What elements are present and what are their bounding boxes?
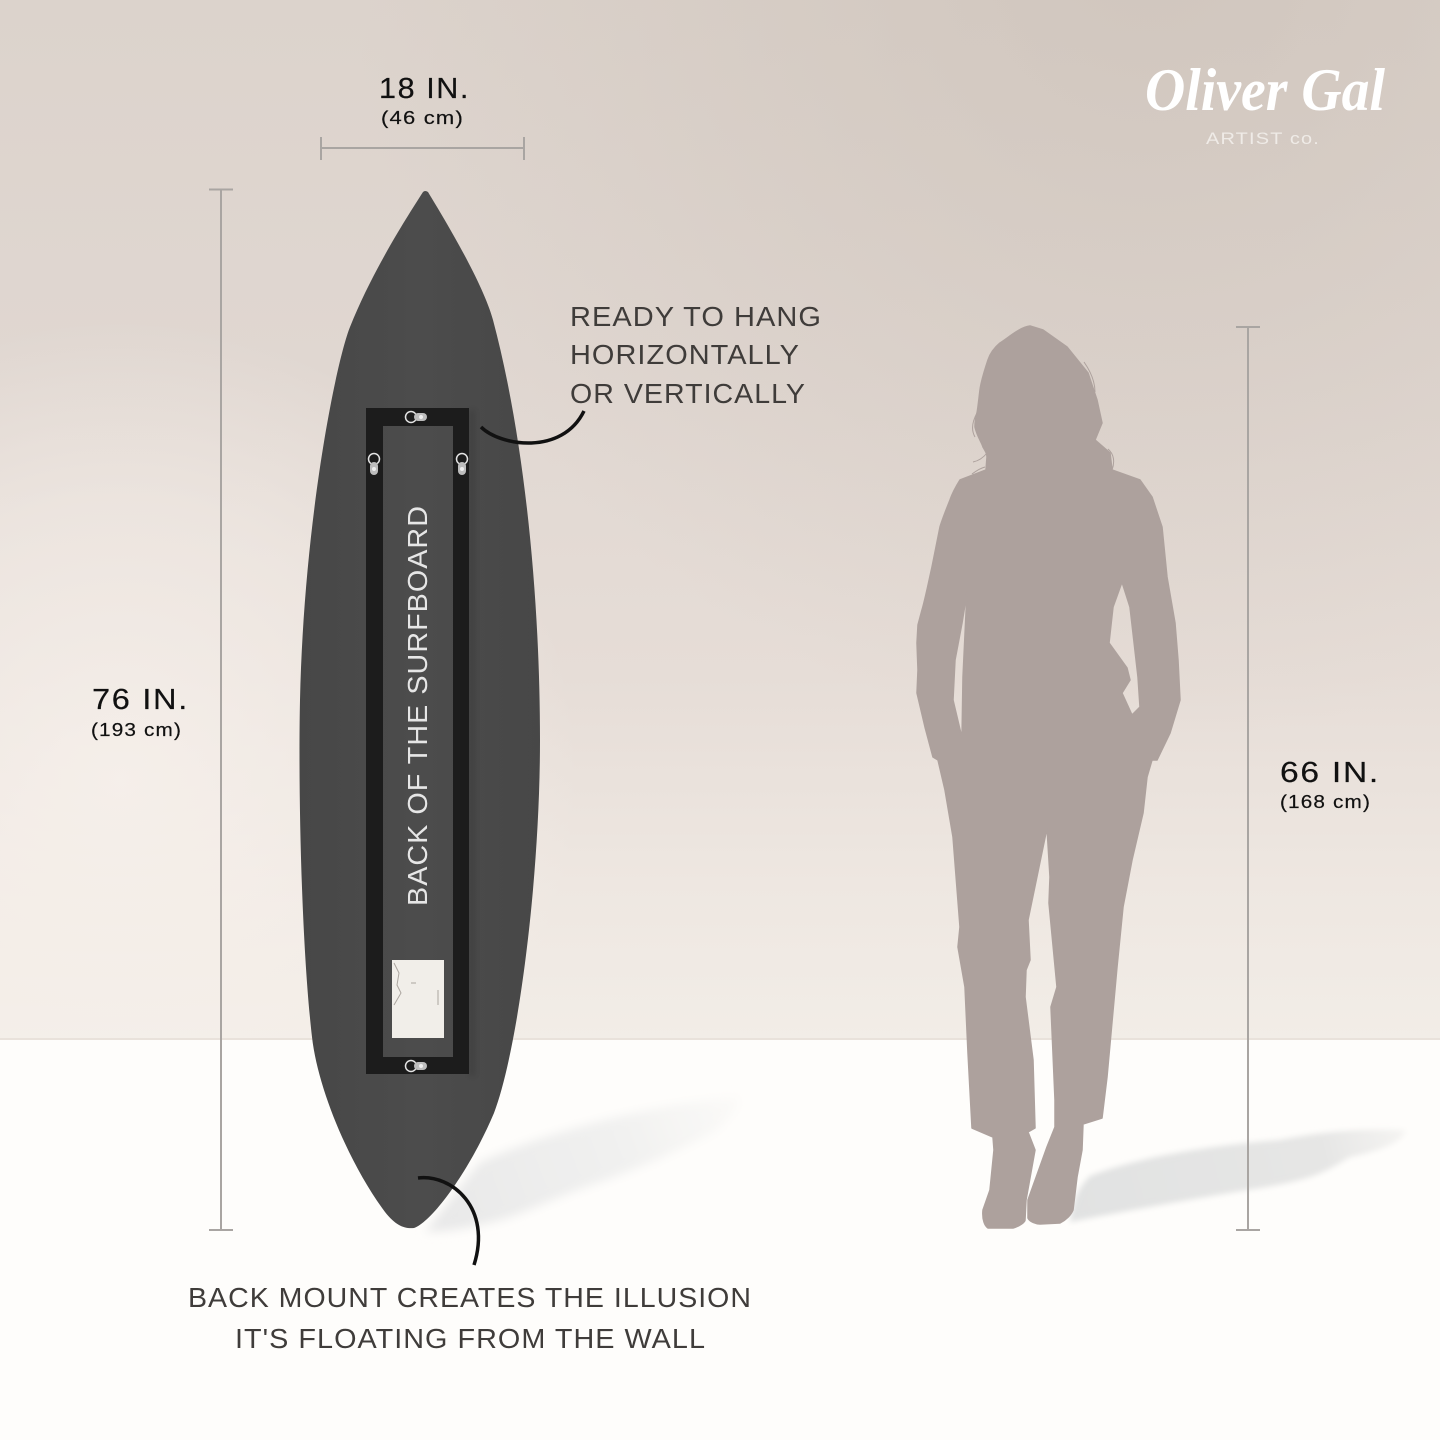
- product label sticker: [392, 960, 444, 1038]
- floor shadow: surfboard: [425, 1097, 739, 1232]
- width label: (46 cm): [381, 108, 464, 128]
- dimension line: board height: [209, 189, 233, 1230]
- hanging clip: top: [406, 412, 427, 422]
- hanging clip: right: [456, 454, 468, 475]
- logo: Oliver Gal Artist Co.: Oliver Gal: [1145, 57, 1385, 123]
- callout: ready to hang: READY TO HANG: [570, 301, 822, 332]
- board height label: 76 IN.: [92, 684, 189, 716]
- width label: [379, 73, 470, 128]
- board height label: [91, 684, 189, 740]
- arrow: back mount leader: [418, 1178, 478, 1265]
- person silhouette: [917, 326, 1180, 1228]
- callout: ready to hang: OR VERTICALLY: [570, 378, 806, 409]
- board height label: (193 cm): [91, 720, 182, 740]
- dimension line: board width: [321, 137, 524, 160]
- floor shadow: person: [1070, 1130, 1405, 1222]
- vertical label: back of the surfboard: BACK OF THE SURFBOARD: [402, 505, 433, 906]
- surfboard back: [300, 191, 540, 1228]
- hanging clip: left: [368, 454, 380, 475]
- logo: Oliver Gal Artist Co.: [1145, 57, 1385, 148]
- logo: Oliver Gal Artist Co.: ARTIST co.: [1206, 129, 1320, 148]
- back mount frame: [366, 408, 475, 1076]
- hanging clip: bottom: [406, 1060, 427, 1072]
- person height label: (168 cm): [1280, 792, 1371, 812]
- width label: 18 IN.: [379, 73, 470, 105]
- person height label: 66 IN.: [1280, 757, 1380, 789]
- callout: ready to hang: [570, 301, 822, 409]
- callout: back mount: IT'S FLOATING FROM THE WALL: [235, 1323, 706, 1354]
- person height label: [1280, 757, 1380, 812]
- dimension line: person height: [1236, 327, 1260, 1230]
- arrow: hang callout leader: [481, 411, 584, 443]
- callout: back mount: [188, 1282, 752, 1354]
- callout: back mount: BACK MOUNT CREATES THE ILLUSION: [188, 1282, 752, 1313]
- callout: ready to hang: HORIZONTALLY: [570, 339, 800, 370]
